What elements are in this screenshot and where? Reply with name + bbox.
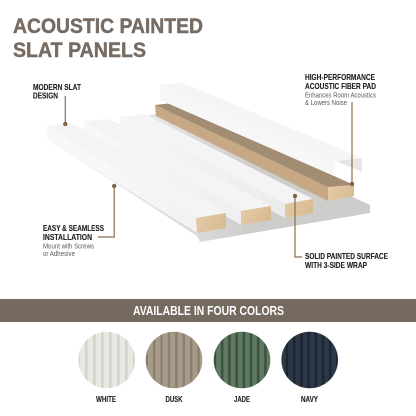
callout: high-performance acoustic fiber pad: & Lowers Noise	[305, 98, 347, 107]
swatch: dusk	[146, 332, 202, 404]
callout: solid painted surface: SOLID PAINTED SURFACE	[305, 251, 388, 261]
slat three	[120, 114, 313, 220]
callout: easy and seamless installation: INSTALLATION	[43, 232, 92, 242]
callout: modern slat design: MODERN SLAT	[33, 82, 82, 92]
slat one	[47, 123, 226, 237]
swatch: navy: NAVY	[301, 395, 319, 404]
swatch: navy	[281, 332, 338, 404]
title	[13, 14, 203, 62]
callout: easy and seamless installation	[43, 184, 116, 258]
callout: easy and seamless installation: or Adhesive	[43, 249, 75, 258]
callout: high-performance acoustic fiber pad: Enhances Room Acoustics	[305, 90, 376, 100]
callout: high-performance acoustic fiber pad	[305, 72, 376, 186]
callout: modern slat design: DESIGN	[33, 90, 58, 100]
slat two	[84, 119, 271, 227]
title: ACOUSTIC PAINTED	[13, 14, 203, 38]
callout: easy and seamless installation: Mount with Screws	[43, 242, 94, 250]
callout: solid painted surface: WITH 3-SIDE WRAP	[305, 260, 367, 270]
swatch: white: WHITE	[96, 395, 117, 404]
callout: high-performance acoustic fiber pad: HIGH-PERFORMANCE	[305, 72, 375, 82]
swatch: jade: JADE	[234, 395, 250, 404]
title: SLAT PANELS	[13, 38, 146, 62]
callout: easy and seamless installation: EASY & SEAMLESS	[43, 223, 104, 233]
callout: modern slat design	[33, 82, 82, 126]
felt backing	[53, 108, 370, 242]
swatch: dusk: DUSK	[166, 395, 183, 404]
swatch: jade	[214, 332, 270, 404]
panel diagram: exploded slat panel	[47, 83, 370, 242]
wood core strip	[155, 103, 354, 201]
swatch: white	[78, 332, 135, 404]
callout: high-performance acoustic fiber pad: ACOUSTIC FIBER PAD	[305, 81, 376, 91]
banner: available in four colors	[0, 299, 416, 322]
painted cap	[160, 83, 362, 176]
callout: solid painted surface	[293, 194, 388, 270]
banner: available in four colors: AVAILABLE IN FOUR COLORS	[133, 304, 284, 318]
